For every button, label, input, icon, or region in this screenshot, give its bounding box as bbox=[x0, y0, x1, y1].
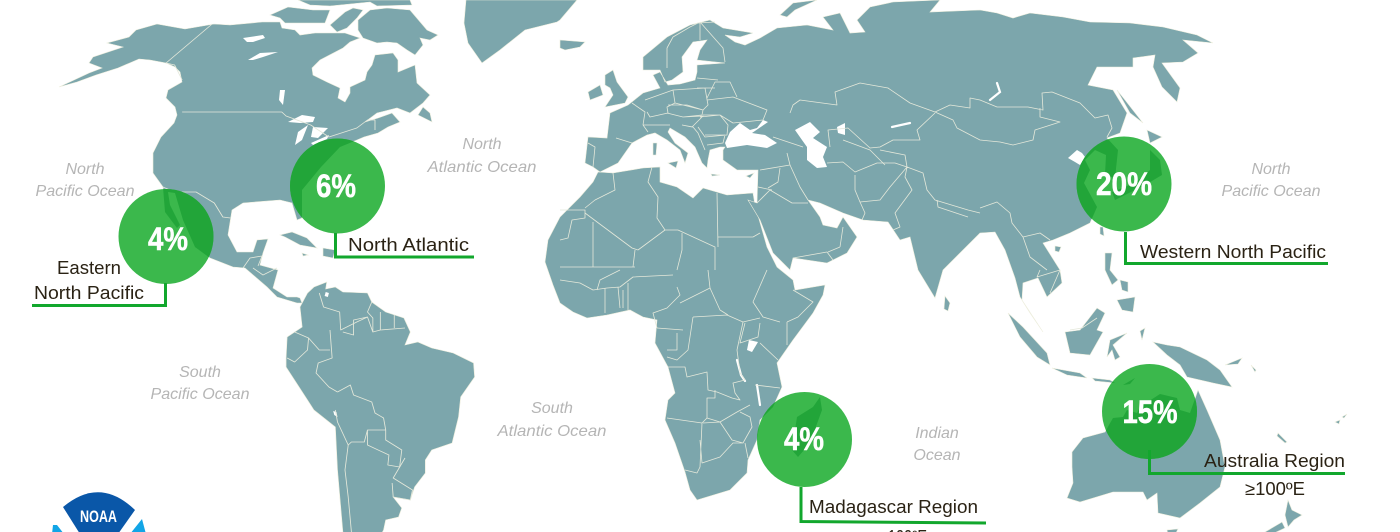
label: north pacific east bbox=[36, 161, 135, 200]
country borders bbox=[163, 22, 1112, 532]
label: north pacific west bbox=[1222, 161, 1321, 200]
circle bbox=[1102, 364, 1197, 459]
region name: North Atlantic bbox=[348, 235, 469, 255]
region name: Madagascar Region bbox=[809, 497, 978, 517]
callout: north atlantic 6% bbox=[290, 138, 474, 258]
callout: western north pacific 20% bbox=[1076, 136, 1328, 265]
region name: North Pacific bbox=[34, 283, 144, 303]
leader line bbox=[1126, 232, 1328, 264]
leader line bbox=[801, 487, 986, 523]
circle bbox=[757, 392, 852, 487]
leader line bbox=[1150, 450, 1345, 474]
longitude note: ≥100ºE bbox=[1245, 479, 1305, 499]
circle bbox=[1076, 136, 1172, 232]
land in circle bbox=[163, 189, 214, 258]
label: south atlantic: Atlantic Ocean bbox=[496, 423, 607, 440]
label: north pacific east: Pacific Ocean bbox=[36, 183, 135, 200]
label: north atlantic: Atlantic Ocean bbox=[426, 159, 537, 176]
callout: australia region 15% bbox=[1102, 364, 1345, 495]
label: indian ocean: Indian bbox=[915, 425, 959, 442]
lakes and inland seas bbox=[243, 35, 1085, 417]
region name: Australia Region bbox=[1204, 451, 1345, 471]
land in circle bbox=[290, 138, 354, 218]
region name: Western North Pacific bbox=[1140, 242, 1326, 262]
label: south atlantic bbox=[496, 400, 607, 440]
leader line bbox=[32, 283, 166, 306]
percentage: 6% bbox=[316, 168, 356, 204]
label: indian ocean: Ocean bbox=[913, 447, 961, 464]
ocean labels bbox=[36, 136, 1321, 464]
label: south pacific: Pacific Ocean bbox=[150, 386, 250, 403]
label: south atlantic: South bbox=[531, 400, 573, 417]
logo light blue wings bbox=[52, 519, 146, 532]
label: north atlantic bbox=[426, 136, 537, 176]
NOAA logo bbox=[52, 492, 146, 532]
region name: Eastern bbox=[57, 258, 121, 278]
label: north atlantic: North bbox=[462, 136, 502, 153]
land in circle bbox=[757, 397, 822, 457]
circle bbox=[118, 189, 214, 284]
percentage: 15% bbox=[1122, 394, 1178, 430]
percentage: 4% bbox=[148, 221, 188, 257]
land in circle bbox=[1076, 139, 1162, 219]
label: south pacific bbox=[150, 364, 250, 403]
circle bbox=[290, 138, 385, 234]
label: south pacific: South bbox=[179, 364, 221, 381]
percentage: 20% bbox=[1096, 166, 1152, 202]
label: north pacific west: North bbox=[1251, 161, 1291, 178]
land in circle bbox=[1106, 378, 1197, 459]
label: indian ocean bbox=[913, 425, 961, 464]
label: north pacific east: North bbox=[65, 161, 105, 178]
callout: madagascar region 4% bbox=[757, 392, 986, 532]
callout: eastern north pacific 4% bbox=[32, 189, 214, 307]
logo dark blue top bbox=[63, 492, 135, 532]
label: north pacific west: Pacific Ocean bbox=[1222, 183, 1321, 200]
leader line bbox=[336, 233, 474, 257]
region name bbox=[34, 258, 144, 303]
logo wordmark: NOAA bbox=[80, 507, 117, 526]
percentage: 4% bbox=[784, 421, 824, 457]
